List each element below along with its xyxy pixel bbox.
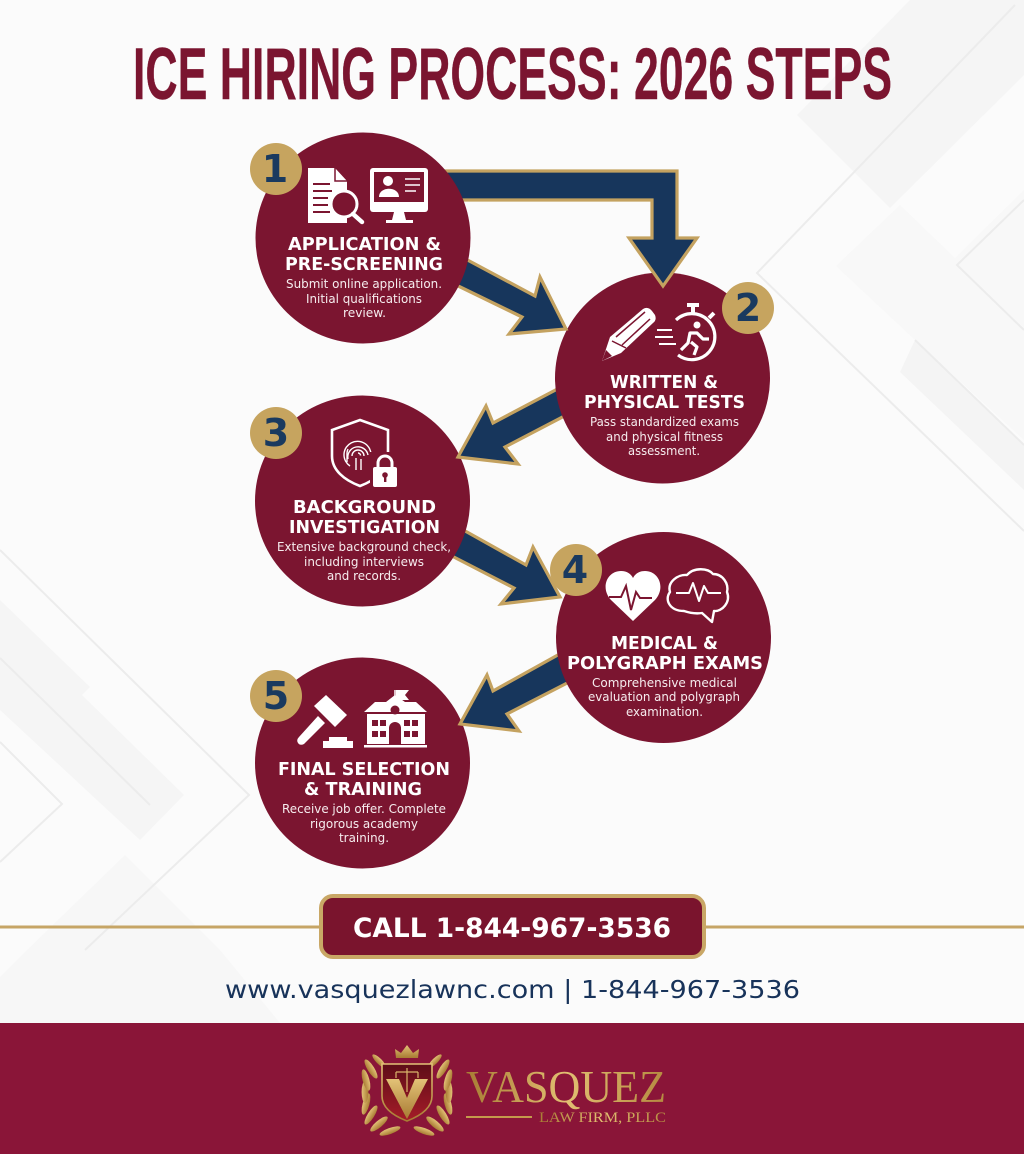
heading	[278, 759, 450, 800]
badge: number 5: 5	[263, 674, 289, 718]
arrow: step 3 to step 4	[448, 527, 560, 604]
icon: academy building with flag	[364, 690, 427, 748]
panel: step 4 medical and polygraph exams	[556, 532, 771, 743]
heading: & TRAINING	[304, 779, 422, 800]
description: and records.	[327, 569, 401, 583]
heading: BACKGROUND	[293, 497, 436, 518]
description: rigorous academy	[310, 817, 418, 831]
description: evaluation and polygraph	[588, 690, 740, 704]
description: Pass standardized exams	[590, 415, 739, 429]
description: examination.	[626, 705, 703, 719]
icon: wreath	[360, 1053, 454, 1138]
heading	[584, 372, 745, 413]
icon: brain with pulse	[668, 569, 728, 622]
panel: step 3 background investigation	[250, 396, 470, 606]
icon: computer profile	[370, 168, 428, 223]
call button	[321, 896, 704, 957]
badge: number 4: 4	[562, 548, 588, 592]
badge: number 5	[250, 670, 302, 722]
badge: number 3	[250, 407, 302, 459]
heading	[567, 633, 763, 674]
description	[282, 802, 446, 845]
badge: number 2	[722, 282, 774, 334]
heading	[285, 234, 443, 275]
description: and physical fitness	[606, 430, 723, 444]
icon: shield with V	[382, 1064, 432, 1121]
description	[590, 415, 739, 458]
badge: number 1	[250, 143, 302, 195]
heading: MEDICAL &	[611, 633, 718, 654]
wordmark: VASQUEZ	[466, 1062, 666, 1112]
badge: number 2: 2	[735, 286, 761, 330]
badge: number 4	[550, 544, 602, 596]
heading: PRE-SCREENING	[285, 254, 443, 275]
heading: APPLICATION &	[288, 234, 441, 255]
footer band	[0, 1023, 1024, 1154]
description	[286, 277, 442, 320]
description: review.	[343, 306, 386, 320]
description: Comprehensive medical	[592, 676, 737, 690]
heading: FINAL SELECTION	[278, 759, 450, 780]
badge: number 3: 3	[263, 411, 289, 455]
logo: Vasquez Law Firm	[360, 1045, 666, 1138]
description	[277, 540, 451, 583]
description: training.	[339, 831, 389, 845]
panel: step 2 written and physical tests	[555, 272, 774, 484]
panel: step 5 final selection and training	[250, 658, 470, 868]
heading: PHYSICAL TESTS	[584, 392, 745, 413]
description: Initial qualifications	[306, 292, 422, 306]
description: assessment.	[628, 444, 700, 458]
icon: document with magnifier	[308, 168, 362, 223]
arrow: step 1 to step 2 (diagonal)	[452, 256, 566, 334]
badge: number 1: 1	[262, 147, 288, 191]
description	[588, 676, 740, 719]
heading: WRITTEN &	[610, 372, 718, 393]
icon: stopwatch with runner	[655, 303, 715, 360]
arrow: step 1 to step 2 (elbow)	[430, 171, 697, 286]
panel: step 1 application and pre-screening	[250, 132, 470, 344]
icon: shield with fingerprint and lock	[332, 420, 400, 489]
icon: pencil	[602, 308, 656, 361]
icon: crown	[395, 1045, 419, 1058]
heading: POLYGRAPH EXAMS	[567, 653, 763, 674]
description: Submit online application.	[286, 277, 442, 291]
heading	[289, 497, 440, 538]
call button: CALL 1-844-967-3536	[353, 913, 671, 944]
icon: heart with pulse	[606, 571, 660, 621]
description: Extensive background check,	[277, 540, 451, 554]
firm name: LAW FIRM, PLLC	[539, 1110, 666, 1126]
icon: gavel	[297, 695, 353, 748]
arrow: step 4 to step 5	[460, 651, 575, 731]
arrow: step 2 to step 3	[458, 385, 572, 464]
description: including interviews	[304, 555, 424, 569]
heading: INVESTIGATION	[289, 517, 440, 538]
website and phone line: www.vasquezlawnc.com | 1-844-967-3536	[225, 975, 800, 1004]
description: Receive job offer. Complete	[282, 802, 446, 816]
